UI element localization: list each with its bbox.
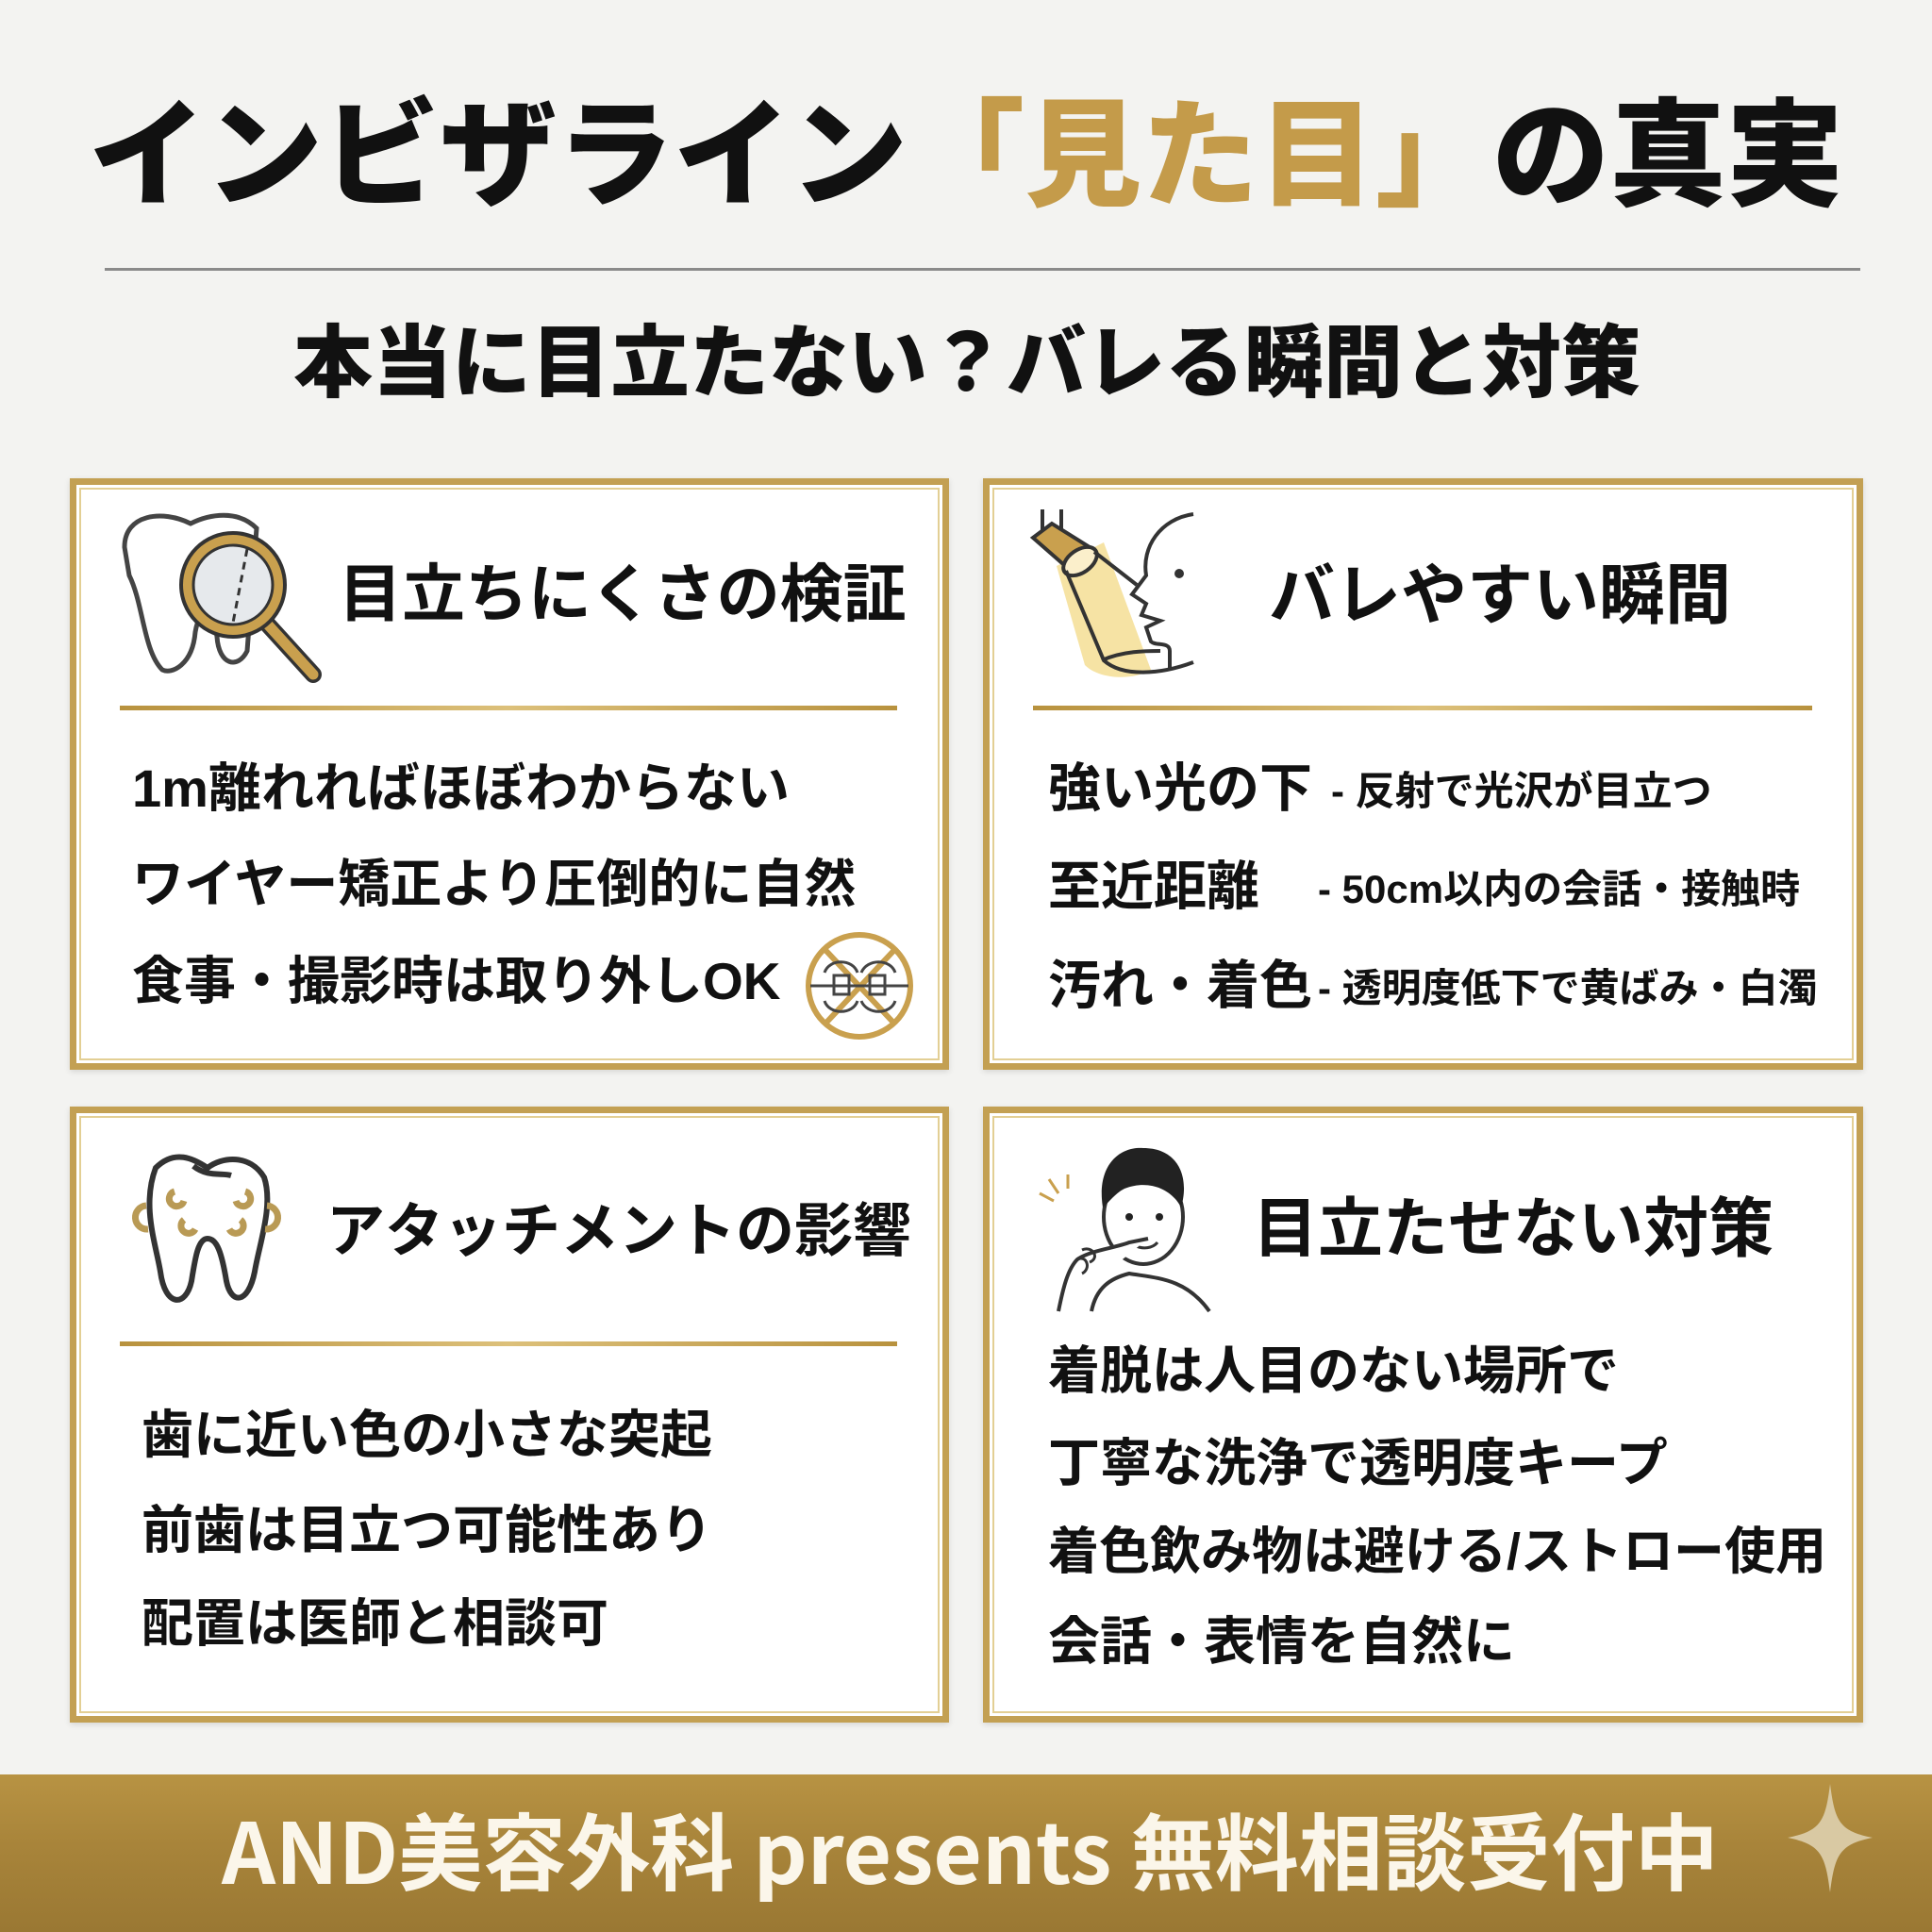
text block: 瞬間: 至近距離 [1048, 857, 1259, 916]
panel: バレやすい瞬間 [983, 478, 1863, 1070]
panel: 目立たせない対策 [983, 1107, 1863, 1723]
footer text: AND美容外科 presents 無料相談受付中 [222, 1787, 1719, 1908]
text block: 瞬間: - 透明度低下で黄ばみ・白濁 [1318, 966, 1818, 1010]
icon: sparkle [1788, 1785, 1873, 1892]
icon: person removing aligner [1039, 1147, 1211, 1313]
text block: 検証: 食事・撮影時は取り外しOK [132, 952, 781, 1010]
text block: 影響 [142, 1406, 712, 1653]
text block: 影響: 歯に近い色の小さな突起 [142, 1406, 712, 1464]
text block: 対策: 丁寧な洗浄で透明度キープ [1048, 1434, 1668, 1492]
text block: 瞬間: - 50cm以内の会話・接触時 [1318, 867, 1800, 911]
text block: 対策: 着色飲み物は避ける/ストロー使用 [1048, 1524, 1826, 1580]
text block: 対策: 着脱は人目のない場所で [1048, 1341, 1619, 1400]
text block: 瞬間: - 反射で光沢が目立つ [1331, 769, 1712, 813]
text block: 対策 [1048, 1341, 1826, 1671]
icon: tooth with attachments [132, 1155, 281, 1303]
text block: 対策: 会話・表情を自然に [1048, 1612, 1515, 1671]
text block: 検証: ワイヤー矯正より圧倒的に自然 [132, 855, 856, 913]
icon: tooth with magnifier [123, 513, 322, 683]
panel: アタッチメントの影響 [70, 1107, 949, 1723]
text block: 瞬間: 汚れ・着色 [1048, 956, 1312, 1015]
footer band [0, 1774, 1932, 1932]
heading: 目立ちにくさの検証: 目立ちにくさの検証 [339, 559, 907, 630]
title: インビザライン「見た目」の真実 [89, 92, 1843, 222]
text block: 検証: 1m離れればほぼわからない [132, 758, 790, 818]
heading: アタッチメントの影響: アタッチメントの影響 [326, 1199, 911, 1264]
heading: 目立たせない対策: 目立たせない対策 [1253, 1192, 1774, 1265]
text block: 影響: 配置は医師と相談可 [142, 1594, 608, 1653]
icon: no braces [806, 932, 913, 1040]
panel: 目立ちにくさの検証 [70, 478, 949, 1070]
icon: spotlight and face [1030, 509, 1194, 677]
subtitle: 本当に目立たない？バレる瞬間と対策 [293, 319, 1641, 408]
text block: 瞬間: 強い光の下 [1048, 758, 1312, 818]
text block: 影響: 前歯は目立つ可能性あり [142, 1501, 712, 1559]
text block: 瞬間 [1048, 758, 1818, 1015]
text block: 検証 [132, 758, 856, 1010]
heading: バレやすい瞬間: バレやすい瞬間 [1269, 558, 1731, 632]
